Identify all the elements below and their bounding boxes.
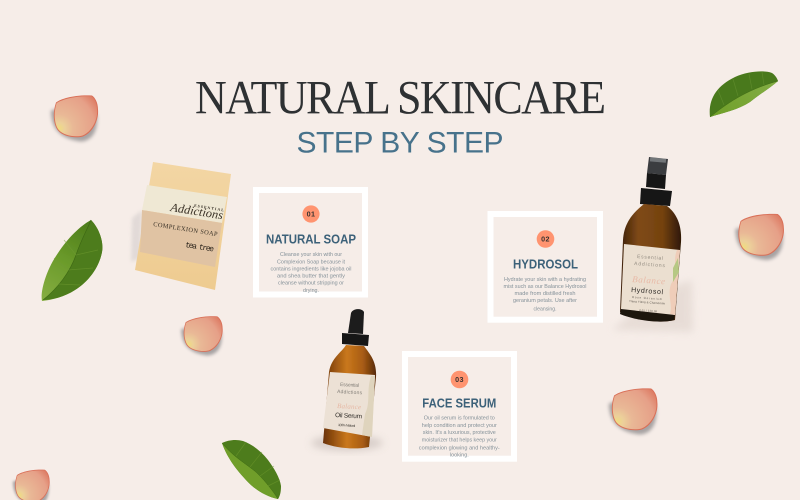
amber bottle body xyxy=(620,204,681,322)
description xyxy=(504,277,586,312)
title: NATURAL SKINCARE xyxy=(195,71,606,124)
label text: Hydrosol xyxy=(631,287,664,296)
description xyxy=(270,252,352,294)
description: drying. xyxy=(303,288,319,294)
label text: Balance xyxy=(337,402,361,411)
soap cream band xyxy=(142,185,227,223)
description: cleanse without stripping or xyxy=(278,281,344,287)
card frame xyxy=(490,214,600,320)
label text: Oil Serum xyxy=(335,412,362,420)
soap scent text: tea tree xyxy=(185,241,215,255)
petal: right xyxy=(735,214,784,260)
number badge: 02 xyxy=(541,235,550,244)
petal: center left xyxy=(181,316,223,355)
spray nozzle xyxy=(647,157,668,175)
description: looking. xyxy=(450,452,469,458)
heading: FACE SERUM xyxy=(422,397,496,411)
number badge: 01 xyxy=(307,210,315,219)
leaf: bottom xyxy=(222,440,281,499)
label text xyxy=(629,254,666,313)
description: help condition and protect your xyxy=(422,423,497,429)
description: geranium petals. Use after xyxy=(513,298,577,304)
soap body xyxy=(135,162,231,290)
description xyxy=(419,416,500,458)
soap brand text: ESSENTIAL xyxy=(194,204,225,212)
petal: lower right xyxy=(609,388,657,434)
description: contains ingredients like jojoba oil xyxy=(270,266,352,272)
amber bottle body xyxy=(323,345,376,448)
label text: Essential xyxy=(637,254,663,262)
heading: HYDROSOL xyxy=(513,258,578,272)
description: Cleanse your skin with our xyxy=(280,252,342,258)
hydrosol bottle xyxy=(612,157,693,332)
subtitle: STEP BY STEP xyxy=(296,126,504,159)
label text xyxy=(335,382,363,428)
description: cleansing. xyxy=(534,306,556,312)
soap shadow xyxy=(131,210,142,262)
label text: Addictions xyxy=(634,261,666,269)
leaf: left xyxy=(42,220,102,301)
label text: Addictions xyxy=(337,389,363,396)
description: skin. It's a luxurious, protective xyxy=(423,430,496,436)
dropper bulb xyxy=(348,309,364,334)
description: moisturizer that helps keep your xyxy=(422,437,497,443)
hydrosol label xyxy=(621,244,680,315)
soap brand text: Addictions xyxy=(169,200,224,222)
card frame xyxy=(405,354,514,459)
number badge: 03 xyxy=(455,375,464,384)
bottle shadow xyxy=(311,435,383,451)
petal: bottom left xyxy=(13,470,50,500)
description: Our oil serum is formulated to xyxy=(424,416,495,422)
label text: Ylang Ylang & Chamomile xyxy=(629,299,666,306)
label text: 100% Natural xyxy=(338,423,355,428)
leaf: upper right xyxy=(710,71,778,117)
card frame xyxy=(256,190,365,294)
petal: upper left xyxy=(51,95,98,142)
serum label xyxy=(323,372,375,437)
bottle collar xyxy=(640,188,672,206)
soap tan band xyxy=(140,210,222,267)
card 03 xyxy=(405,354,514,459)
description: made from distilled fresh xyxy=(514,291,576,297)
bottle shadow xyxy=(612,280,693,332)
label text: Rose Geranium xyxy=(632,295,663,301)
description: and shea butter that gently xyxy=(277,274,345,280)
soap bar xyxy=(131,162,231,290)
label floral xyxy=(670,250,680,315)
description: complexion glowing and healthy- xyxy=(419,445,500,451)
description: Complexion Soap because it xyxy=(277,259,346,265)
serum bottle xyxy=(311,309,383,451)
label text: Balance xyxy=(632,274,665,286)
bottle base xyxy=(620,308,675,322)
dropper collar xyxy=(342,333,369,346)
description: mist such as our Balance Hydrosol xyxy=(504,284,586,290)
card 01 xyxy=(256,190,365,294)
card 02 xyxy=(490,214,600,320)
description: Hydrate your skin with a hydrating xyxy=(504,277,586,283)
label floral xyxy=(362,376,375,437)
heading: NATURAL SOAP xyxy=(266,232,356,246)
soap name text: COMPLEXION SOAP xyxy=(153,221,218,238)
label text: 4 oz / 120 ml xyxy=(639,308,658,313)
label text: Essential xyxy=(340,382,359,389)
